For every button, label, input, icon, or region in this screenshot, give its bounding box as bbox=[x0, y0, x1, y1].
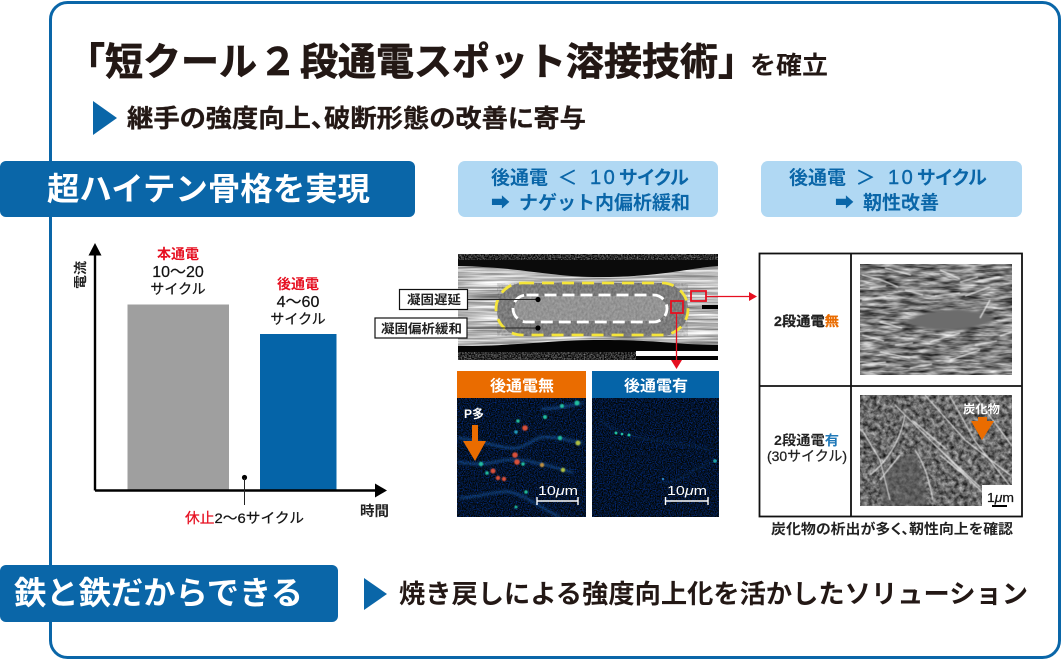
scale box 1um bbox=[982, 485, 1020, 515]
post current label: 4～60 bbox=[277, 294, 319, 311]
table: SEM comparison bbox=[760, 254, 1022, 516]
main current label: サイクル bbox=[150, 281, 206, 297]
row label: with bbox=[767, 433, 847, 464]
main current label: 本通電 bbox=[157, 246, 199, 262]
leader points bbox=[467, 297, 541, 331]
header box: under 10 cycles: ＜ bbox=[558, 168, 577, 189]
panel: with post current bbox=[592, 371, 719, 517]
axis label: time: 時間 bbox=[360, 503, 389, 519]
label: solidification delay bbox=[400, 290, 468, 310]
post current label: サイクル bbox=[270, 311, 326, 327]
caption: carbide conclusion: 炭化物の析出が多く、靭性向上を確認 bbox=[771, 521, 1013, 537]
panel: without post current: 後通電無 bbox=[490, 376, 555, 395]
axis label: current: 電流 bbox=[73, 261, 88, 289]
title: 短クール bbox=[105, 42, 257, 84]
scale bar 10um bbox=[666, 483, 708, 505]
yellow dashed outline bbox=[496, 283, 688, 335]
label: solidification delay: 凝固遅延 bbox=[407, 292, 462, 307]
post current label: 後通電 bbox=[277, 276, 319, 292]
rest marker bbox=[242, 475, 247, 505]
header box: under 10 cycles bbox=[458, 161, 718, 217]
row label: with: (30サイクル) bbox=[767, 448, 847, 464]
header box: over 10 cycles: ➡ bbox=[835, 193, 854, 214]
header box: over 10 cycles: 靭性改善 bbox=[863, 192, 939, 214]
header box: over 10 cycles: 後通電 bbox=[789, 167, 846, 189]
header box: under 10 cycles: ➡ bbox=[491, 193, 510, 214]
axes bbox=[95, 254, 376, 490]
header box: under 10 cycles: 10 bbox=[590, 167, 617, 189]
header box: over 10 cycles: サイクル bbox=[917, 167, 987, 189]
banner: ultra high tensile frame: 超ハイテン骨格を実現 bbox=[47, 171, 370, 207]
lower dark band bbox=[458, 340, 718, 360]
bar chart: current vs time bbox=[73, 243, 389, 526]
P-rich label: P多 bbox=[464, 406, 484, 421]
label: segregation relaxation: 凝固偏析緩和 bbox=[381, 321, 462, 336]
banner: ultra high tensile frame bbox=[0, 161, 415, 217]
title: 「 bbox=[67, 42, 105, 84]
scale bar 10um: 10 μm bbox=[667, 483, 707, 498]
title: ２ bbox=[259, 42, 297, 84]
banner: iron and iron: 鉄と鉄だからできる bbox=[14, 575, 303, 611]
panel: without post current bbox=[457, 371, 586, 517]
rest label: 休止2～6サイクル bbox=[185, 510, 304, 526]
header box: under 10 cycles: サイクル bbox=[619, 167, 689, 189]
SEM image: without bbox=[860, 264, 1012, 375]
title: を確立 bbox=[750, 52, 828, 80]
white dashed outline bbox=[513, 295, 667, 322]
axis arrowheads bbox=[88, 243, 387, 498]
title bbox=[67, 42, 828, 84]
scale bar 10um bbox=[537, 483, 578, 505]
steel sheets bbox=[458, 254, 718, 360]
sheet interface gaps bbox=[468, 304, 490, 309]
banner: iron and iron bbox=[0, 565, 338, 622]
subtitle with triangle bullet: 継手の強度向上、破断形態の改善に寄与 bbox=[127, 105, 586, 133]
label: segregation relaxation bbox=[375, 318, 467, 338]
arrow: to SEM table bbox=[706, 292, 757, 301]
main current label: 10～20 bbox=[152, 264, 204, 281]
panel: with post current: 後通電有 bbox=[624, 376, 688, 395]
header box: under 10 cycles: 後通電 bbox=[491, 167, 548, 189]
scale box 1um: 1μm bbox=[987, 490, 1014, 505]
title: 段通電スポット溶接技術 bbox=[300, 42, 718, 84]
scale bar 10um: 10 μm bbox=[538, 483, 578, 498]
SEM image: with bbox=[860, 395, 1012, 506]
bottom statement: 焼き戻しによる強度向上化を活かしたソリューション bbox=[399, 579, 1028, 609]
label: carbide: 炭化物 bbox=[963, 402, 1001, 416]
main current label bbox=[150, 246, 206, 297]
element map bbox=[457, 398, 586, 517]
scale bar bbox=[636, 351, 718, 356]
title: 」 bbox=[718, 42, 756, 84]
post current label bbox=[270, 276, 326, 327]
weld cross-section micrograph bbox=[375, 254, 718, 360]
row label: without: 2段通電無 bbox=[774, 313, 840, 329]
main current bar bbox=[128, 304, 229, 490]
red inspection squares bbox=[671, 291, 706, 313]
header box: over 10 cycles bbox=[761, 161, 1022, 217]
header box: over 10 cycles: 10 bbox=[888, 167, 915, 189]
row label: with: 2段通電有 bbox=[774, 433, 839, 448]
icon: orange arrow bbox=[463, 425, 486, 461]
element map bbox=[592, 398, 719, 517]
post current bar bbox=[260, 334, 336, 490]
nugget bbox=[497, 283, 688, 336]
header box: over 10 cycles: ＞ bbox=[856, 168, 875, 189]
header box: under 10 cycles: ナゲット内偏析緩和 bbox=[519, 192, 690, 214]
icon: orange arrow bbox=[971, 417, 994, 440]
upper dark band bbox=[458, 260, 718, 277]
arrow: to element maps bbox=[671, 313, 682, 369]
